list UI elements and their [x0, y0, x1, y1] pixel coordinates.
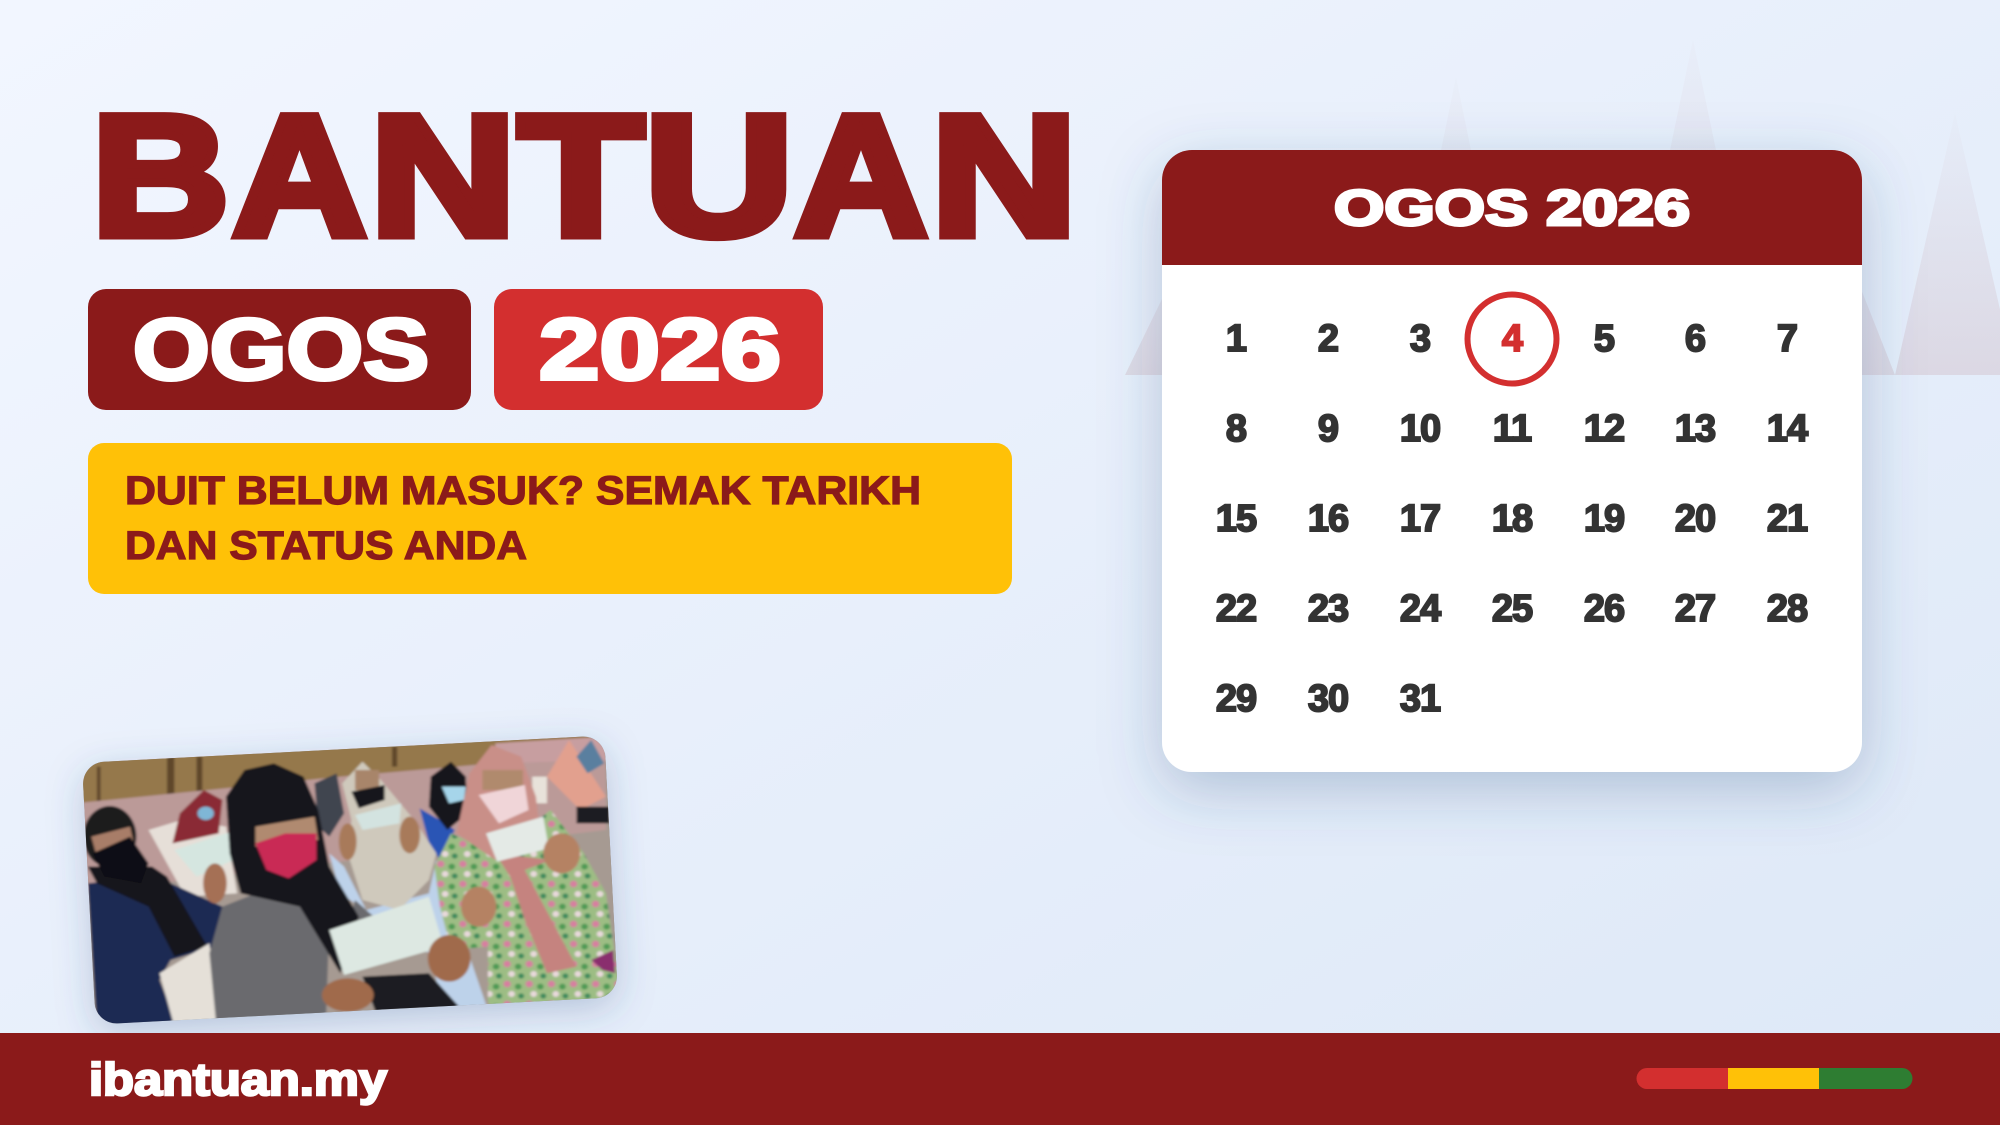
- title: BANTUAN: T: [518, 80, 644, 272]
- photo: women holding cheques: [60, 720, 638, 1040]
- date grid: 5: [1594, 318, 1615, 360]
- date grid: 16: [1308, 498, 1348, 540]
- date grid: 2: [1318, 318, 1338, 360]
- title: BANTUAN: A: [232, 80, 366, 272]
- date grid: 31: [1400, 678, 1441, 720]
- calendar card body: [1162, 150, 1862, 772]
- date grid: 1: [1226, 318, 1247, 360]
- date grid: 18: [1492, 498, 1532, 540]
- tricolour accent bar: [1636, 1068, 1913, 1089]
- date grid: 4: [1502, 318, 1523, 360]
- title: BANTUAN: B: [92, 80, 229, 272]
- date grid: 22: [1216, 588, 1256, 630]
- footer website text: ibantuan.my: [89, 1054, 387, 1105]
- date grid: 23: [1308, 588, 1348, 630]
- date grid: 24: [1400, 588, 1441, 630]
- date grid: 14: [1767, 408, 1808, 450]
- calendar header: OGOS 2026: [1334, 180, 1690, 236]
- highlight circle on date 4: [1468, 294, 1556, 384]
- date grid: 26: [1584, 588, 1624, 630]
- year badge: 2026: 2026: [539, 302, 781, 398]
- date grid: 17: [1400, 498, 1440, 540]
- date grid: 7: [1777, 318, 1797, 360]
- title: BANTUAN: [92, 80, 1077, 272]
- date grid: 30: [1308, 678, 1348, 720]
- year badge: 2026: [494, 289, 823, 410]
- date grid: 11: [1493, 408, 1532, 450]
- title: BANTUAN: N: [370, 80, 516, 272]
- title: BANTUAN: A: [794, 80, 928, 272]
- date grid: 21: [1767, 498, 1808, 540]
- decorative background triangles: [1125, 40, 2000, 375]
- month badge: OGOS: OGOS: [133, 302, 429, 398]
- month badge: OGOS: [88, 289, 471, 410]
- footer bar: [0, 1033, 2000, 1125]
- date grid: 27: [1675, 588, 1715, 630]
- date grid: 29: [1216, 678, 1256, 720]
- date grid: 15: [1216, 498, 1257, 540]
- date grid: 20: [1675, 498, 1715, 540]
- calendar header: [1162, 150, 1862, 265]
- date grid: 8: [1226, 408, 1246, 450]
- date grid: 13: [1675, 408, 1715, 450]
- panel: calendar: [1162, 150, 1862, 772]
- title: BANTUAN: U: [644, 80, 794, 272]
- date grid: 10: [1400, 408, 1440, 450]
- date grid: 6: [1685, 318, 1705, 360]
- date grid: 12: [1584, 408, 1624, 450]
- title: BANTUAN: N: [931, 80, 1077, 272]
- date grid: 28: [1767, 588, 1807, 630]
- date grid: 25: [1492, 588, 1533, 630]
- date grid: [1216, 294, 1808, 720]
- date grid: 19: [1584, 498, 1624, 540]
- date grid: 9: [1318, 408, 1338, 450]
- subtitle banner: DUIT BELUM MASUK? SEMAK TARIKH: [125, 469, 921, 513]
- date grid: 3: [1410, 318, 1430, 360]
- subtitle banner: [88, 443, 1012, 594]
- subtitle banner: DAN STATUS ANDA: [125, 524, 527, 568]
